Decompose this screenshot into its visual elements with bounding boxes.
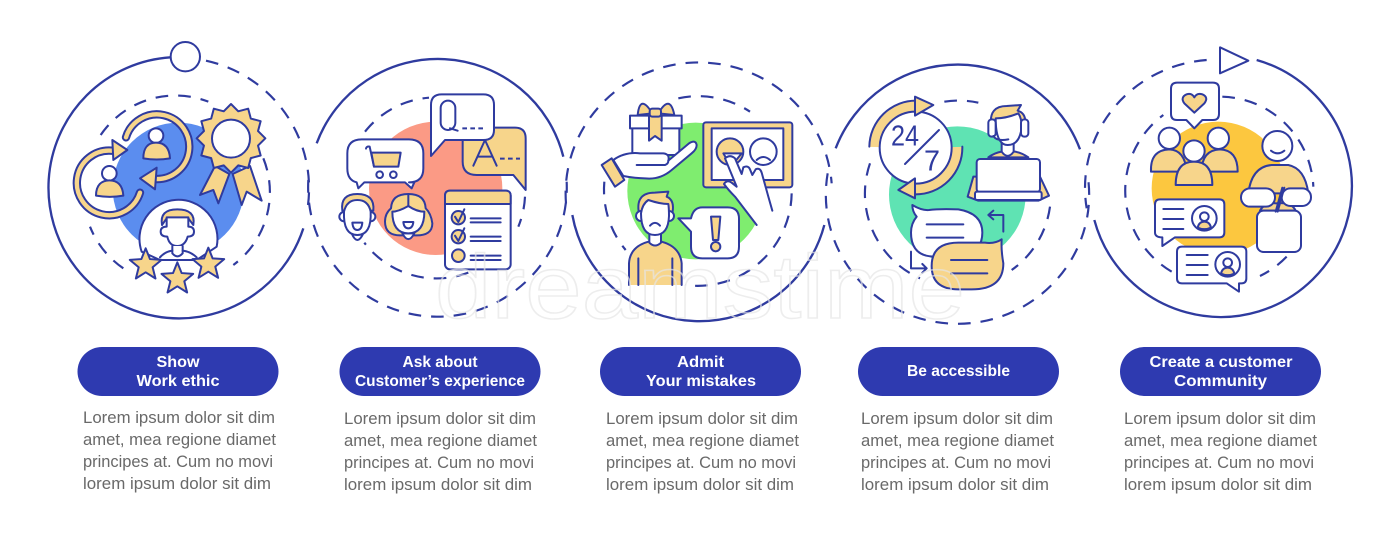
icon: checklist — [445, 191, 511, 269]
step 4 label — [858, 347, 1059, 396]
background circle: green — [627, 123, 764, 259]
step 3 description: principes at. Cum no movi — [606, 454, 796, 472]
step 4 description: amet, mea regione diamet — [861, 432, 1054, 450]
pill heading — [1150, 354, 1292, 390]
step 4 description: principes at. Cum no movi — [861, 454, 1051, 472]
panel: show work ethic — [48, 42, 309, 318]
pill heading: Community — [1174, 373, 1267, 390]
icon: chat bubbles — [911, 205, 1003, 289]
step 4 description: lorem ipsum dolor sit dim — [861, 476, 1049, 494]
orbit rings — [48, 57, 309, 318]
background circle: amber — [1152, 122, 1285, 255]
background circle: blue — [113, 123, 244, 254]
pill heading: Admit — [677, 354, 725, 371]
step 5 description: amet, mea regione diamet — [1124, 432, 1317, 450]
icon: award medal — [197, 104, 265, 205]
pill — [78, 347, 278, 396]
step 2 label — [340, 347, 540, 396]
icon: 24/7 clock: 24 — [891, 120, 919, 152]
icon: rated employee with stars — [130, 200, 224, 292]
watermark: dreamstime — [435, 238, 965, 338]
step 5 label — [1120, 347, 1321, 396]
pill heading: Customer’s experience — [355, 373, 525, 390]
pill — [858, 347, 1059, 396]
icon: rotating employees — [77, 114, 189, 215]
marker: play triangle — [1220, 47, 1248, 73]
orbit rings — [308, 59, 567, 317]
icon: sad employee — [629, 192, 682, 285]
icon: male customer — [339, 194, 375, 240]
step 1 description: lorem ipsum dolor sit dim — [83, 475, 271, 493]
pill — [1120, 347, 1321, 396]
orbit rings — [1085, 60, 1352, 317]
icon: group of customers — [1151, 128, 1238, 185]
icon: review card one — [1155, 199, 1224, 246]
step 1 description: amet, mea regione diamet — [83, 431, 276, 449]
step 1 description — [83, 409, 276, 493]
background circle: salmon — [369, 122, 502, 255]
step 3 description: Lorem ipsum dolor sit dim — [606, 410, 798, 428]
icon: support agent with laptop — [968, 105, 1049, 201]
icon: question bubble — [431, 94, 494, 156]
step 3 description: lorem ipsum dolor sit dim — [606, 476, 794, 494]
pill — [340, 347, 540, 396]
background circle: teal — [889, 126, 1026, 263]
icon: gift box on hand — [602, 104, 697, 187]
icon: 24/7 clock — [869, 97, 962, 198]
pill heading: Your mistakes — [646, 373, 756, 390]
step 1 description: principes at. Cum no movi — [83, 453, 273, 471]
step 5 description — [1124, 410, 1317, 494]
pill heading — [646, 354, 756, 390]
step 2 description: amet, mea regione diamet — [344, 432, 537, 450]
step 5 description: principes at. Cum no movi — [1124, 454, 1314, 472]
step 2 description: Lorem ipsum dolor sit dim — [344, 410, 536, 428]
step 5 description: lorem ipsum dolor sit dim — [1124, 476, 1312, 494]
step 4 description: Lorem ipsum dolor sit dim — [861, 410, 1053, 428]
step 3 description — [606, 410, 799, 494]
pill heading: Show — [156, 354, 200, 371]
step 1 label — [78, 347, 278, 396]
pill heading — [355, 354, 525, 390]
icon: heart bubble — [1171, 83, 1219, 128]
step 2 description: principes at. Cum no movi — [344, 454, 534, 472]
icon: answer bubble — [463, 128, 526, 190]
panel: admit your mistakes — [566, 62, 832, 321]
panel: create a customer community — [1085, 47, 1352, 317]
step 4 description — [861, 410, 1054, 494]
icon: alert bubble — [678, 207, 739, 258]
step 5 description: Lorem ipsum dolor sit dim — [1124, 410, 1316, 428]
step 2 description: lorem ipsum dolor sit dim — [344, 476, 532, 494]
icon: feedback tablet — [703, 122, 792, 225]
pill heading: Work ethic — [136, 373, 220, 390]
pill heading: Be accessible — [907, 363, 1010, 380]
panel: ask about customer's experience — [308, 59, 567, 317]
panel: be accessible — [826, 65, 1089, 324]
icon: 24/7 clock: 7 — [924, 146, 940, 178]
marker: small circle — [171, 42, 200, 71]
orbit rings — [826, 65, 1089, 324]
pill heading: Create a customer — [1150, 354, 1292, 371]
orbit rings — [566, 62, 832, 321]
step 3 description: amet, mea regione diamet — [606, 432, 799, 450]
step 1 description: Lorem ipsum dolor sit dim — [83, 409, 275, 427]
step 3 label — [600, 347, 801, 396]
pill heading: Ask about — [402, 354, 478, 371]
icon: review card two — [1177, 247, 1246, 292]
icon: shopper with bag — [1241, 131, 1311, 252]
icon: female customer — [385, 194, 432, 239]
pill — [600, 347, 801, 396]
icon: shopping cart bubble — [347, 139, 423, 188]
pill heading — [136, 354, 220, 390]
step 2 description — [344, 410, 537, 494]
